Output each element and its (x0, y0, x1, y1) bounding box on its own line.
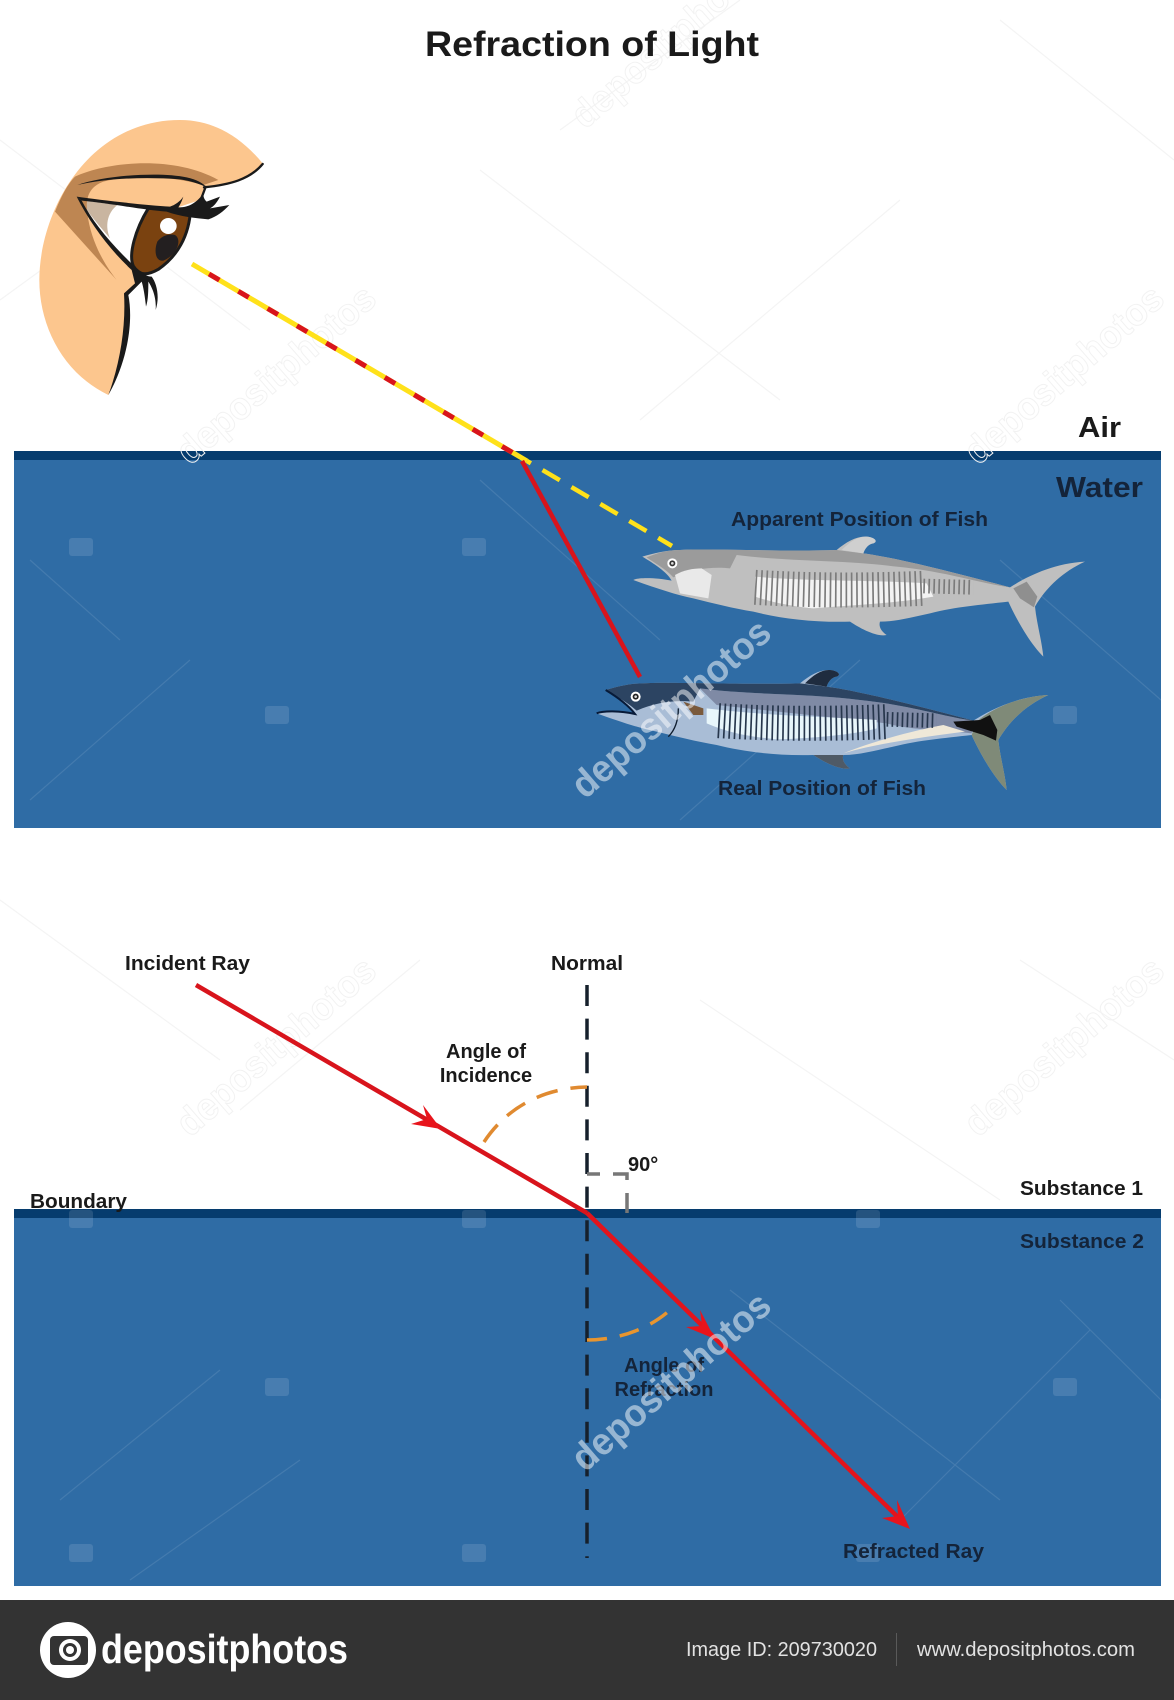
watermark: logos on water: depositphotos (563, 611, 780, 807)
real fish: silver flank (700, 688, 973, 733)
watermark: logos on water (563, 611, 780, 1480)
eye: skin (39, 120, 263, 395)
eye: iris (132, 208, 191, 274)
top panel: water (14, 451, 1161, 828)
incident ray with arrow (196, 985, 587, 1213)
footer: logo wordmark: depositphotos (101, 1626, 348, 1672)
real fish: body (597, 670, 1048, 790)
normal line (585, 985, 589, 1558)
label: Angle of Incidence: Incidence (440, 1065, 532, 1087)
watermark: faint outlined logos on white: depositphotos (168, 949, 385, 1145)
label: Incident Ray: Incident Ray (125, 953, 251, 975)
real fish: mouth and snout line (597, 690, 635, 714)
label: Angle of Refraction: Refraction (615, 1379, 713, 1401)
eye: inner corner shade (80, 200, 117, 238)
real fish: tail fin (972, 695, 1048, 790)
bottom panel: substance 2 (14, 1209, 1161, 1586)
sight ray: yellow with red dashes (192, 264, 527, 461)
label: Boundary: Boundary (30, 1191, 128, 1213)
footer: logo icon (40, 1622, 96, 1678)
label: 90 degrees: 90° (628, 1154, 658, 1176)
real fish: anal fin (813, 755, 850, 769)
footer: image id: Image ID: 209730020 (686, 1639, 877, 1661)
apparent fish: eye (667, 558, 677, 568)
real fish: eye (631, 692, 641, 702)
real fish: gill line (668, 708, 678, 737)
label: Angle of Refraction: Angle of (624, 1355, 704, 1377)
label: Apparent Position of Fish: Apparent Position of Fish (731, 508, 988, 531)
eye: brow shadow (55, 163, 218, 280)
eye: upper lid and lashes (77, 193, 229, 219)
watermark: faint outlined logos on white: depositphotos (168, 277, 385, 473)
watermark: camera icons (69, 538, 1077, 1562)
label: Substance 2: Substance 2 (1020, 1231, 1144, 1253)
apparent fish: cheek (675, 568, 712, 598)
real fish (597, 670, 1048, 790)
label: Refracted Ray: Refracted Ray (843, 1541, 985, 1563)
apparent fish: tail base (1013, 582, 1037, 607)
icon: human eye (39, 120, 263, 395)
real fish: light band (707, 708, 877, 739)
real fish: cream belly (843, 725, 965, 753)
footer: divider (896, 1633, 897, 1666)
apparent ray: yellow dashed (527, 461, 672, 546)
footer bar (0, 1600, 1174, 1700)
label: Real Position of Fish: Real Position of Fish (718, 777, 926, 800)
apparent fish (633, 537, 1085, 657)
label: Air: Air (1078, 412, 1121, 444)
watermark: faint outlined logos on white (168, 0, 1173, 1145)
apparent fish: stripes (755, 586, 973, 590)
real fish: dorsal fin (805, 670, 839, 687)
apparent fish: light band (755, 577, 933, 608)
right angle marker (587, 1174, 627, 1213)
label: Water: Water (1056, 472, 1143, 504)
real fish: back (606, 683, 973, 721)
title: Refraction of Light (425, 25, 759, 64)
apparent fish: back (647, 550, 1010, 587)
real fish: tail base (953, 715, 997, 741)
real fish: pectoral fin (683, 702, 703, 715)
footer: website: www.depositphotos.com (916, 1639, 1135, 1661)
eye: white of the eye (78, 198, 187, 270)
label: Substance 1: Substance 1 (1020, 1178, 1143, 1200)
real ray: red (522, 461, 640, 677)
apparent fish: dorsal fin (842, 537, 876, 553)
real fish: stripes (718, 719, 937, 723)
label: Normal: Normal (551, 953, 623, 975)
eye: lower lid and nose line (77, 197, 158, 395)
refracted ray with arrows (587, 1213, 910, 1529)
apparent fish: body (633, 537, 1085, 657)
angle of refraction arc (587, 1310, 670, 1340)
watermark: logos on water: depositphotos (563, 1284, 780, 1480)
label: Angle of Incidence: Angle of (446, 1041, 526, 1063)
angle of incidence arc (484, 1087, 587, 1142)
eye: crease line (77, 164, 263, 198)
